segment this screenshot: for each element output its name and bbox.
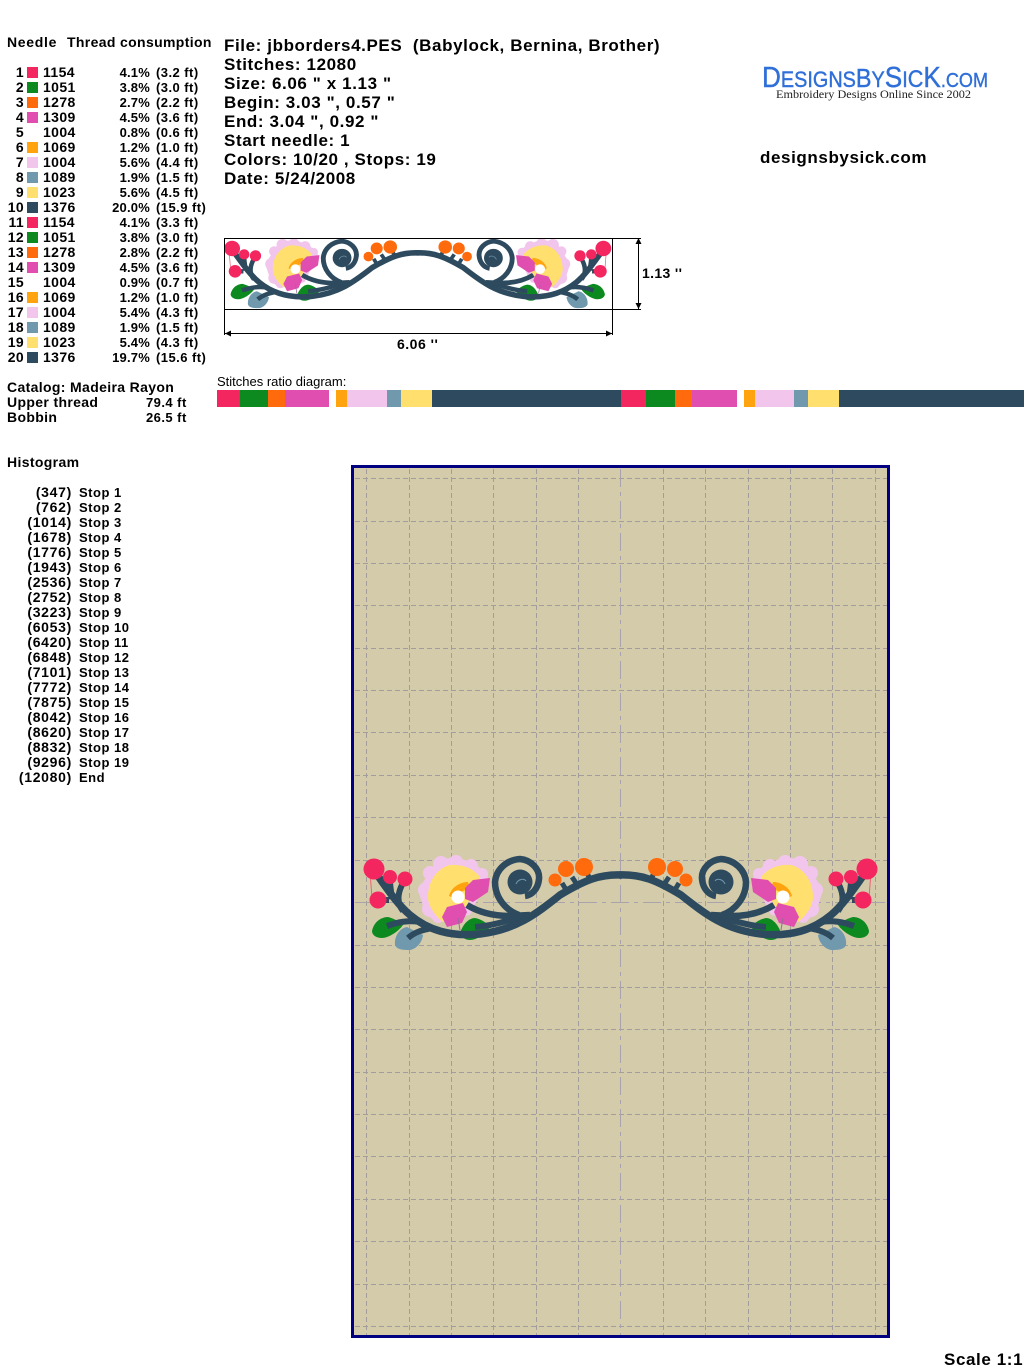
file information block: End: 3.04 ", 0.92 ": [224, 112, 379, 131]
needle and thread table: 1069: [43, 139, 76, 155]
histogram stop list: (8620): [27, 724, 72, 740]
needle and thread table: 5: [16, 124, 24, 140]
stitches ratio label: Stitches ratio diagram:: [217, 374, 346, 389]
needle and thread table: 1069: [43, 289, 76, 305]
needle and thread table: 2: [16, 79, 24, 95]
histogram stop list: Stop 4: [79, 530, 122, 545]
histogram stop list: Stop 7: [79, 575, 122, 590]
logo: DESIGNSBYSICK.COM: [762, 62, 988, 94]
file information block: Colors: 10/20 , Stops: 19: [224, 150, 436, 169]
histogram stop list: (3223): [27, 604, 72, 620]
needle and thread table: 3.8%: [120, 80, 150, 95]
needle and thread table: (4.4 ft): [156, 155, 199, 170]
histogram stop list: Stop 16: [79, 710, 129, 725]
catalog summary: 79.4 ft: [146, 395, 187, 410]
needle and thread table: 4.5%: [120, 260, 150, 275]
needle and thread table: (3.0 ft): [156, 230, 199, 245]
needle and thread table: 11: [8, 214, 24, 230]
file information block: Stitches: 12080: [224, 55, 357, 74]
histogram stop list: (8042): [27, 709, 72, 725]
scale label: Scale 1:1: [944, 1350, 1023, 1369]
histogram stop list: Stop 8: [79, 590, 122, 605]
needle and thread table: 1.2%: [120, 140, 150, 155]
histogram stop list: (2752): [27, 589, 72, 605]
needle and thread table: 1051: [43, 229, 76, 245]
catalog summary: Upper thread: [7, 394, 98, 410]
histogram stop list: (8832): [27, 739, 72, 755]
needle and thread table: 5.4%: [120, 305, 150, 320]
needle and thread table: [8, 64, 206, 365]
needle and thread table: 4.1%: [120, 215, 150, 230]
thumbnail embroidery with dimension lines: [224, 238, 642, 336]
histogram stop list: Stop 13: [79, 665, 129, 680]
needle and thread table: 14: [8, 259, 24, 275]
needle and thread table: (15.9 ft): [156, 200, 206, 215]
needle and thread table: (15.6 ft): [156, 350, 206, 365]
needle and thread table: 1089: [43, 319, 76, 335]
needle and thread table: (3.3 ft): [156, 215, 199, 230]
needle and thread table: 6: [16, 139, 24, 155]
needle and thread table: 3: [16, 94, 24, 110]
histogram stop list: (12080): [19, 769, 72, 785]
histogram stop list: Stop 6: [79, 560, 122, 575]
histogram stop list: Stop 3: [79, 515, 122, 530]
needle and thread table: 1004: [43, 274, 76, 290]
file information block: Date: 5/24/2008: [224, 169, 356, 188]
histogram stop list: (6420): [27, 634, 72, 650]
stitch ratio bar: [217, 390, 1024, 407]
file information block: Size: 6.06 " x 1.13 ": [224, 74, 392, 93]
histogram stop list: Stop 11: [79, 635, 129, 650]
needle and thread table: 1089: [43, 169, 76, 185]
logo: Embroidery Designs Online Since 2002: [776, 87, 971, 101]
histogram stop list: (1678): [27, 529, 72, 545]
needle and thread table: (1.5 ft): [156, 320, 199, 335]
needle and thread table: 20: [8, 349, 24, 365]
histogram heading: Histogram: [7, 454, 79, 470]
needle and thread table: 8: [16, 169, 24, 185]
height dimension label: 1.13 '': [642, 265, 682, 281]
needle and thread table: 1154: [43, 214, 75, 230]
needle and thread table: 13: [8, 244, 24, 260]
file information block: File: jbborders4.PES (Babylock, Bernina, Brother): [224, 36, 660, 55]
catalog summary: Bobbin: [7, 409, 57, 425]
needle and thread table: (1.0 ft): [156, 290, 199, 305]
needle and thread table: (4.5 ft): [156, 185, 199, 200]
histogram stop list: Stop 15: [79, 695, 129, 710]
histogram stop list: Stop 19: [79, 755, 129, 770]
needle and thread table: 1278: [43, 244, 76, 260]
file information block: Begin: 3.03 ", 0.57 ": [224, 93, 395, 112]
needle and thread table: 2.8%: [120, 245, 150, 260]
file information block: [224, 36, 660, 188]
histogram stop list: (6053): [27, 619, 72, 635]
needle and thread table: 1278: [43, 94, 76, 110]
needle and thread table: 1: [16, 64, 24, 80]
needle and thread table: 1.9%: [120, 320, 150, 335]
histogram stop list: (347): [36, 484, 72, 500]
needle table heading: Thread consumption: [67, 34, 212, 50]
needle and thread table: 5.4%: [120, 335, 150, 350]
needle and thread table: 10: [8, 199, 24, 215]
needle and thread table: (0.7 ft): [156, 275, 199, 290]
needle and thread table: (3.6 ft): [156, 260, 199, 275]
histogram stop list: (7875): [27, 694, 72, 710]
sewing field panel: [352, 466, 888, 1336]
histogram stop list: (7101): [27, 664, 72, 680]
histogram stop list: (1776): [27, 544, 72, 560]
file information block: Start needle: 1: [224, 131, 350, 150]
needle and thread table: (2.2 ft): [156, 95, 199, 110]
needle and thread table: 1309: [43, 259, 76, 275]
histogram stop list: Stop 14: [79, 680, 129, 695]
needle and thread table: 1004: [43, 124, 76, 140]
histogram stop list: End: [79, 770, 105, 785]
needle and thread table: 9: [16, 184, 24, 200]
histogram stop list: Stop 1: [79, 485, 122, 500]
needle and thread table: 19: [8, 334, 24, 350]
needle and thread table: 1051: [43, 79, 76, 95]
needle and thread table: 16: [8, 289, 24, 305]
histogram stop list: (762): [36, 499, 72, 515]
histogram stop list: (9296): [27, 754, 72, 770]
needle and thread table: (0.6 ft): [156, 125, 199, 140]
histogram stop list: (1014): [27, 514, 72, 530]
needle and thread table: (4.3 ft): [156, 335, 199, 350]
needle and thread table: 1309: [43, 109, 76, 125]
catalog summary: Catalog: Madeira Rayon: [7, 379, 174, 395]
needle and thread table: 2.7%: [120, 95, 150, 110]
needle and thread table: (2.2 ft): [156, 245, 199, 260]
catalog summary: [7, 379, 187, 425]
needle and thread table: 1.2%: [120, 290, 150, 305]
needle and thread table: 5.6%: [120, 185, 150, 200]
needle and thread table: 4.5%: [120, 110, 150, 125]
needle and thread table: 15: [8, 274, 24, 290]
website address: designsbysick.com: [760, 148, 927, 167]
histogram stop list: [19, 484, 129, 785]
needle and thread table: (3.0 ft): [156, 80, 199, 95]
histogram stop list: (1943): [27, 559, 72, 575]
needle table heading: Needle: [7, 34, 57, 50]
histogram stop list: Stop 10: [79, 620, 129, 635]
needle and thread table: 17: [8, 304, 24, 320]
histogram stop list: (6848): [27, 649, 72, 665]
histogram stop list: Stop 18: [79, 740, 129, 755]
needle and thread table: 19.7%: [112, 350, 150, 365]
needle and thread table: (1.0 ft): [156, 140, 199, 155]
needle and thread table: 3.8%: [120, 230, 150, 245]
needle and thread table: (4.3 ft): [156, 305, 199, 320]
needle and thread table: (3.2 ft): [156, 65, 199, 80]
needle and thread table: 5.6%: [120, 155, 150, 170]
histogram stop list: Stop 12: [79, 650, 129, 665]
main embroidery design: [364, 855, 878, 950]
needle and thread table: 7: [16, 154, 24, 170]
needle and thread table: 4: [16, 109, 24, 125]
needle and thread table: 20.0%: [112, 200, 150, 215]
catalog summary: 26.5 ft: [146, 410, 187, 425]
needle and thread table: 1376: [43, 199, 76, 215]
needle and thread table: 1154: [43, 64, 75, 80]
needle and thread table: 12: [8, 229, 24, 245]
histogram stop list: Stop 17: [79, 725, 129, 740]
needle and thread table: 1004: [43, 154, 76, 170]
histogram stop list: (7772): [27, 679, 72, 695]
needle and thread table: (1.5 ft): [156, 170, 199, 185]
needle and thread table: 0.9%: [120, 275, 150, 290]
needle and thread table: 0.8%: [120, 125, 150, 140]
needle and thread table: 1.9%: [120, 170, 150, 185]
histogram stop list: (2536): [27, 574, 72, 590]
needle and thread table: (3.6 ft): [156, 110, 199, 125]
width dimension label: 6.06 '': [397, 336, 438, 352]
needle and thread table: 1004: [43, 304, 76, 320]
needle and thread table: 1023: [43, 334, 76, 350]
needle and thread table: 1023: [43, 184, 76, 200]
needle and thread table: 18: [8, 319, 24, 335]
needle and thread table: 4.1%: [120, 65, 150, 80]
histogram stop list: Stop 2: [79, 500, 122, 515]
histogram stop list: Stop 5: [79, 545, 122, 560]
needle and thread table: 1376: [43, 349, 76, 365]
histogram stop list: Stop 9: [79, 605, 122, 620]
